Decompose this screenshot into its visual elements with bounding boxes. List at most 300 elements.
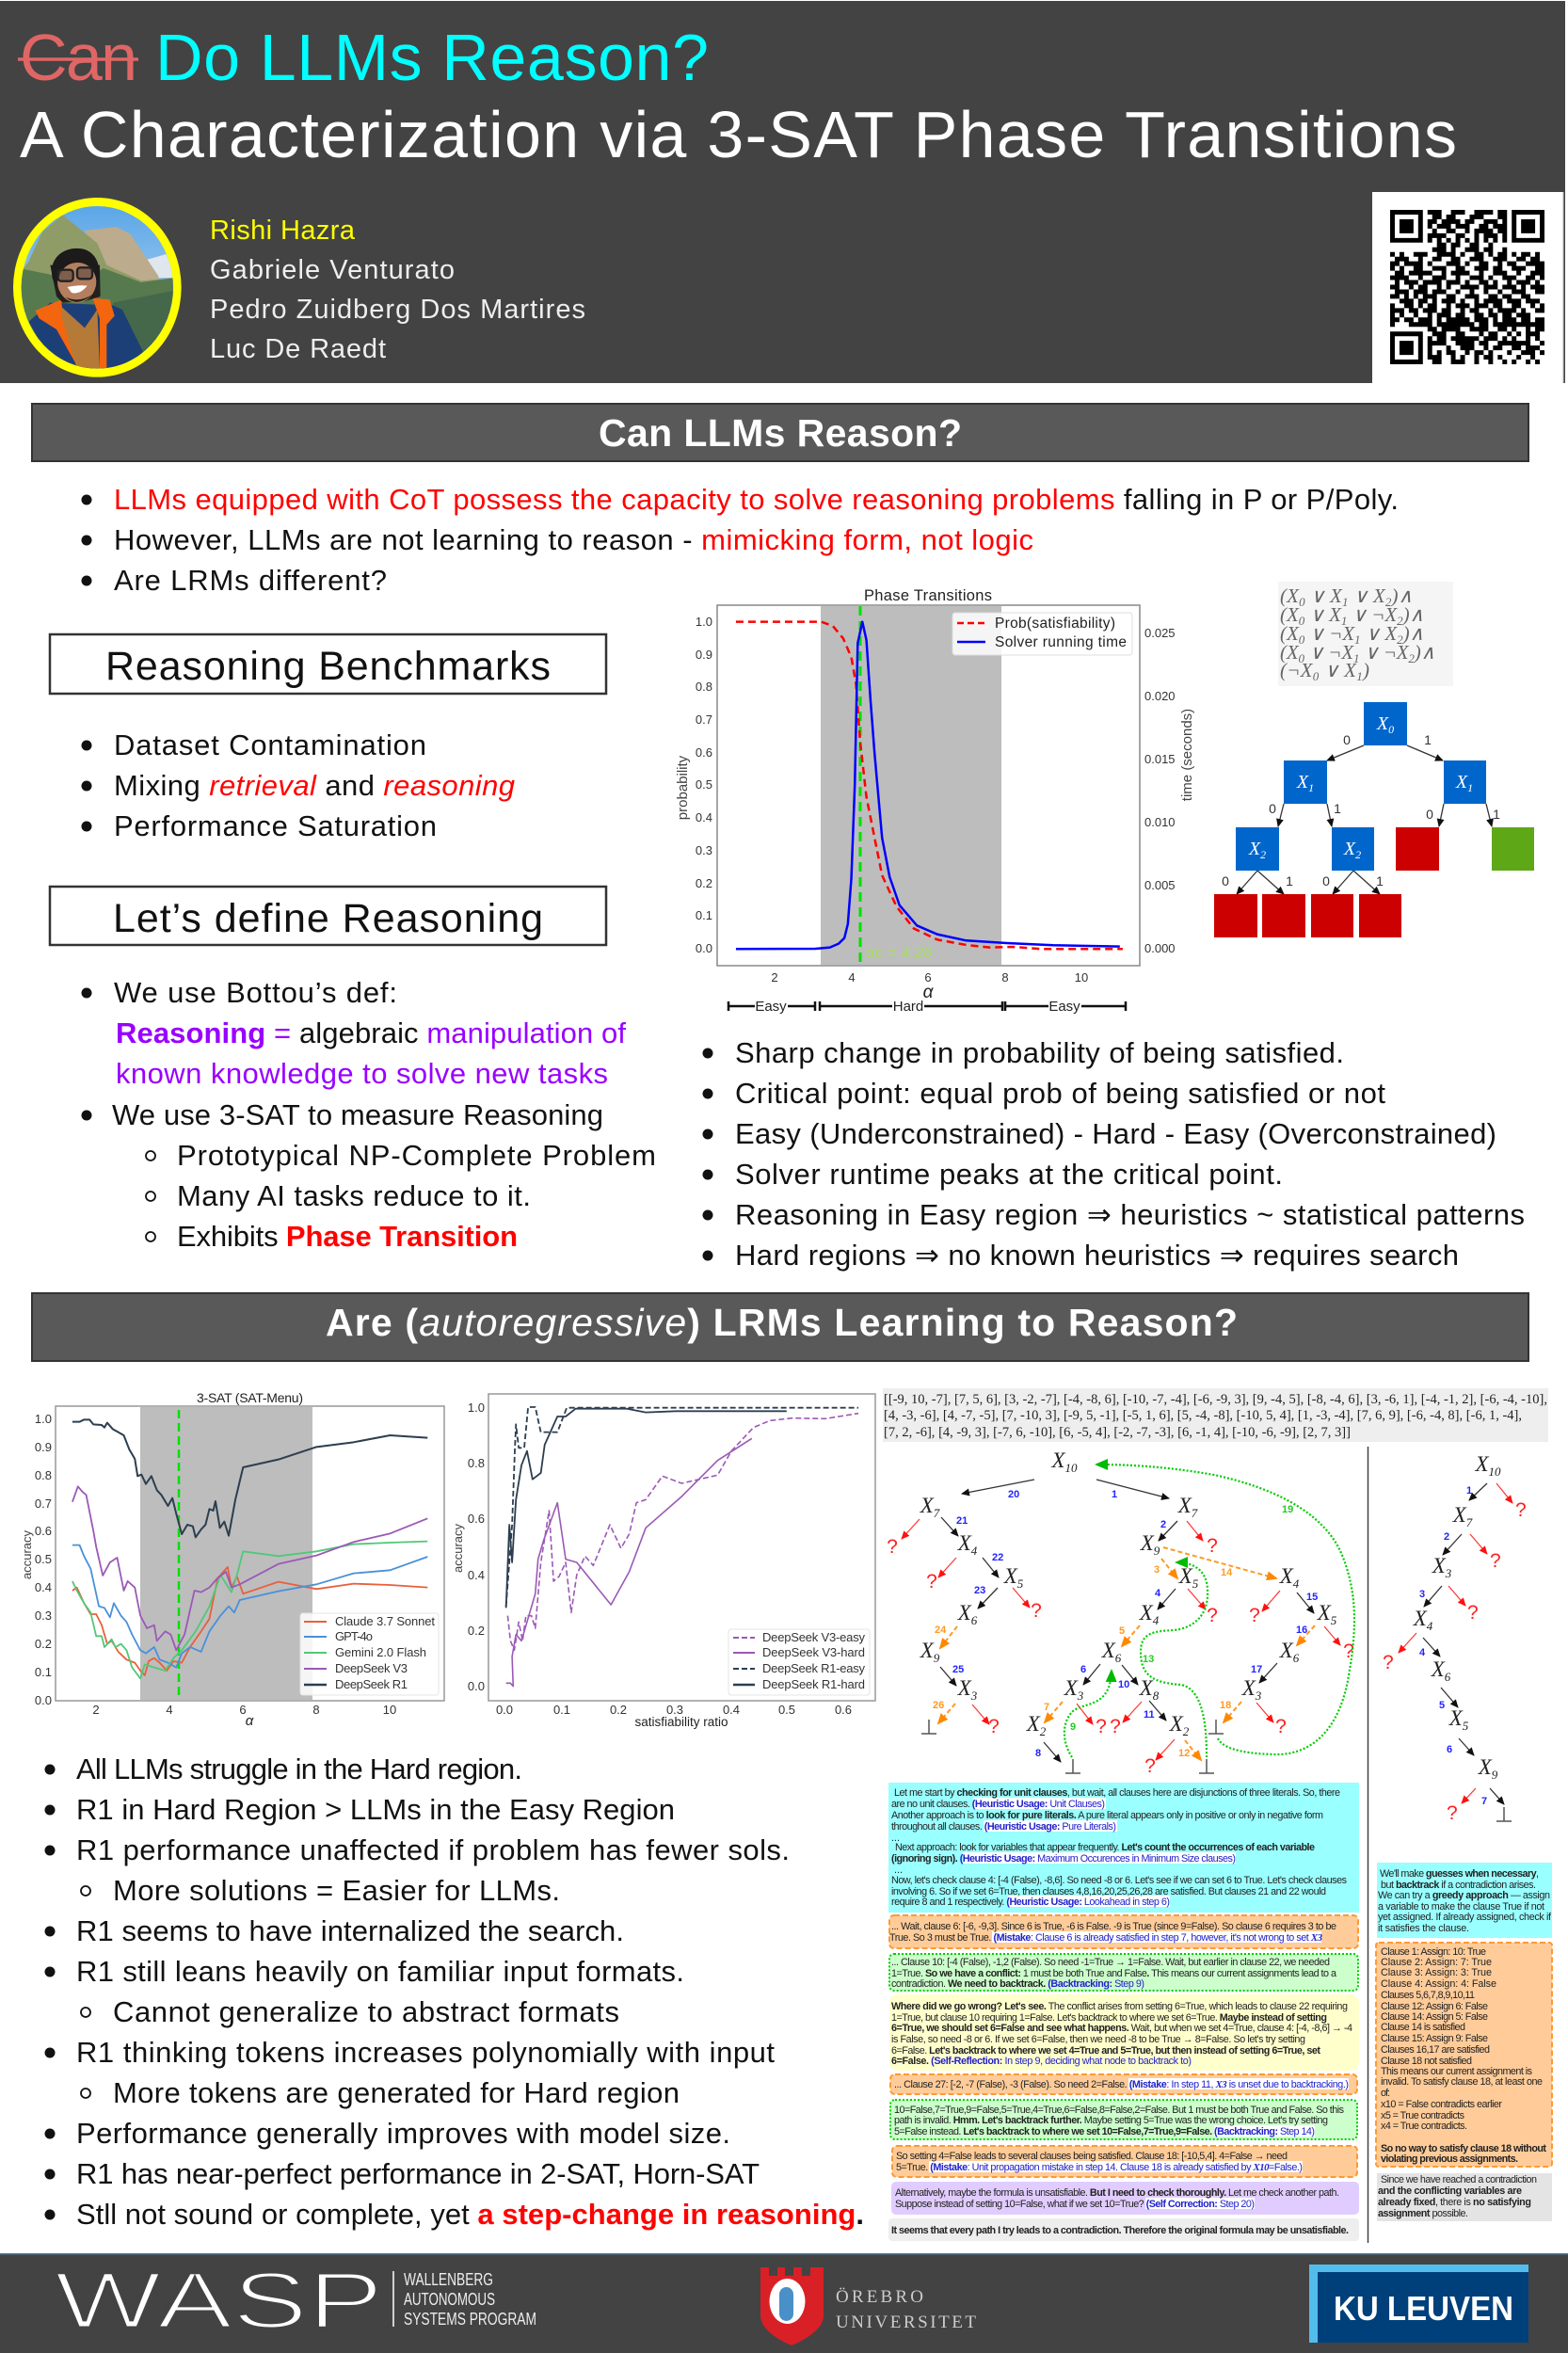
R1 search tree with backtracking: 22: [992, 1552, 1003, 1563]
logo: WASP: WALLENBERG: [404, 2270, 493, 2289]
DPLL decision tree: 1: [1286, 873, 1293, 888]
CNF formula: ∨ ¬X: [1304, 622, 1355, 645]
R1 search tree with backtracking: X: [1027, 1712, 1040, 1736]
intro bullets: [81, 483, 1399, 597]
easy hard easy scale: Easy: [755, 999, 787, 1015]
DPLL decision tree: 2: [1260, 848, 1266, 861]
phase transition bullets: [702, 1036, 1525, 1272]
R1 search tree with backtracking: ?: [1031, 1600, 1042, 1622]
CNF formula: ∨ X: [1349, 584, 1386, 607]
R1 search tree with backtracking: 5: [1119, 1625, 1125, 1637]
intro bullets: LLMs equipped with CoT possess the capacity to solve reasoning problems falling in P or P/Poly.: [114, 483, 1399, 516]
V3 search tree without backtracking: X: [1449, 1706, 1463, 1730]
CNF formula: ∨ X: [1361, 622, 1398, 645]
panel: mistake 1: ... Wait, clause 6: [-6, -9,3]. Since 6 is True, -6 is False. -9 is True (since 9=False). So clause 6 requires 3 to be: [891, 1921, 1336, 1932]
panel: self-reflection: is False, so need -8 or 6. If we set 6=False, then we need -8 to be True → 8=False. So let's try setting: [891, 2034, 1305, 2045]
R1 search tree with backtracking: 7: [1044, 1702, 1049, 1713]
panel: heuristic usage: require 8 and 1 respectively. (Heuristic Usage: Lookahead in step 6): [891, 1897, 1170, 1908]
panel: greedy approach: a variable to make the clause True if not: [1378, 1901, 1544, 1913]
panel: self-reflection: Where did we go wrong? Let's see. The conflict arises from setting 6=True, which leads to clause 22 requiring: [891, 2001, 1348, 2012]
accuracy vs satisfiability ratio chart: 0.2: [468, 1624, 485, 1638]
panel: backtracking 2: path is invalid. Hmm. Let's backtrack further. Maybe setting 5=True was the wrong choice. Let's try setting: [894, 2115, 1328, 2126]
panel: greedy approach: [1377, 1863, 1552, 1938]
CNF formula: 1: [1341, 614, 1347, 628]
V3 search tree without backtracking: ?: [1383, 1652, 1394, 1673]
accuracy chart: 3-SAT SAT-Menu: 0.1: [35, 1665, 52, 1679]
phase transition chart: 0.020: [1144, 689, 1176, 703]
V3 search tree without backtracking: 6: [1445, 1670, 1451, 1684]
phase transition chart: 0.015: [1144, 752, 1176, 766]
DPLL decision tree: 0: [1426, 807, 1433, 822]
DPLL decision tree: X: [1344, 839, 1355, 859]
logo: WASP: [55, 2256, 536, 2345]
CNF formula: ∨ ¬X: [1304, 641, 1354, 664]
accuracy chart: 3-SAT SAT-Menu: 0.6: [35, 1524, 52, 1538]
3-SAT clause list: [7, 2, -6], [4, -9, 3], [-7, 6, -10], [6, -5, 4], [-2, -7, -3], [6, -1, 4], [-10, -6, -9], [2, 7, 3]]: [884, 1425, 1351, 1440]
R1 search tree with backtracking: 26: [933, 1700, 944, 1711]
accuracy vs satisfiability ratio chart: 0.1: [553, 1703, 570, 1717]
phase transition chart: 0.5: [696, 777, 712, 792]
panel: mistake 3: [892, 2146, 1357, 2177]
panel: greedy approach: it satisfies the clause.: [1378, 1923, 1469, 1934]
accuracy vs satisfiability ratio chart: 0.4: [468, 1568, 485, 1582]
R1 search tree with backtracking: 6: [971, 1613, 978, 1627]
panel: self correction: [891, 2182, 1359, 2215]
DPLL decision tree: 1: [1334, 801, 1341, 816]
logo: Orebro University: [760, 2267, 976, 2345]
heading: Reasoning Benchmarks: [50, 634, 606, 694]
R1 search tree with backtracking: 21: [956, 1515, 968, 1527]
accuracy chart: 3-SAT SAT-Menu: [20, 1390, 444, 1729]
legend: DeepSeek R1: [335, 1677, 408, 1691]
DPLL decision tree: X: [1377, 713, 1388, 734]
panel: self correction: Alternatively, maybe the formula is unsatisfiable. But I need to check thoroughly. Let me check another path.: [895, 2187, 1339, 2199]
panel: clause assignments: This means our current assignment is: [1381, 2066, 1533, 2077]
phase transition chart: Phase Transitions: [864, 587, 992, 604]
phase transition chart: 1.0: [696, 615, 712, 629]
DPLL decision tree: 0: [1222, 873, 1229, 888]
panel: conclusion: [888, 2218, 1359, 2241]
R1 search tree with backtracking: ?: [1343, 1641, 1354, 1662]
logo: KU Leuven: [1309, 2265, 1528, 2343]
panel: mistake 3: So setting 4=False leads to several clauses being satisfied. Clause 18: [-10,5,4]. 4=False → need: [896, 2151, 1288, 2162]
DPLL decision tree: X: [1249, 839, 1260, 859]
benchmark bullets: Dataset Contamination: [114, 728, 426, 761]
CNF formula: )∧: [1402, 603, 1424, 626]
title line 1: Do LLMs Reason?: [155, 21, 709, 94]
R1 search tree with backtracking: X: [1280, 1639, 1293, 1662]
panel: clause assignments: Clause 18 not satisfied: [1381, 2056, 1472, 2067]
panel: heuristic usage: throughout all clauses. (Heuristic Usage: Pure Literals): [891, 1821, 1116, 1833]
legend: Solver running time: [995, 634, 1127, 650]
CNF formula: 1: [1356, 669, 1363, 683]
findings bullets: Cannot generalize to abstract formats: [113, 1995, 619, 2028]
accuracy chart: 3-SAT SAT-Menu: 0.7: [35, 1497, 52, 1511]
panel: backtracking 2: 10=False,7=True,9=False,5=True,4=True,6=False,8=False,2=False. But 1 must be both True and False. So this: [894, 2105, 1345, 2116]
phase transition chart: [675, 587, 1195, 1015]
panel: self-reflection: [889, 1994, 1359, 2071]
V3 search tree without backtracking: 3: [1445, 1566, 1452, 1580]
author photo: [13, 198, 182, 377]
accuracy vs satisfiability ratio chart: [451, 1394, 875, 1729]
V3 search tree without backtracking: ?: [1447, 1802, 1458, 1824]
phase transition bullets: Easy (Underconstrained) - Hard - Easy (Overconstrained): [735, 1117, 1496, 1150]
phase transition chart: probability: [675, 755, 691, 820]
V3 search tree without backtracking: X: [1414, 1607, 1427, 1630]
panel: clause assignments: Clauses 16,17 are satisfied: [1381, 2044, 1490, 2056]
accuracy vs satisfiability ratio chart: 0.3: [666, 1703, 683, 1717]
legend: DeepSeek R1-easy: [762, 1661, 866, 1675]
heading: Reasoning Benchmarks: Reasoning Benchmarks: [105, 644, 551, 689]
panel: self-reflection: 1=True, but clause 10 requiring 1=False. Let's backtrack to where we set 6=True. Maybe instead of setting: [891, 2012, 1327, 2024]
panel: self-reflection: 6=False. Let's backtrack to where we set 4=True and 5=True, but then instead of setting 6=True, set: [891, 2045, 1320, 2057]
accuracy chart: 3-SAT SAT-Menu: 0.9: [35, 1440, 52, 1454]
CNF formula: 1: [1354, 632, 1361, 647]
CNF formula: )∧: [1402, 622, 1424, 645]
findings bullets: R1 in Hard Region > LLMs in the Easy Region: [76, 1793, 675, 1826]
CNF formula: ∨ X: [1304, 603, 1342, 626]
panel: greedy approach: yet assigned. If already assigned, check if: [1378, 1912, 1552, 1923]
R1 search tree with backtracking: X: [1140, 1676, 1153, 1700]
panel: clause assignments: Clause 14 is satisfied: [1381, 2022, 1465, 2033]
R1 search tree with backtracking: X: [1170, 1712, 1183, 1736]
panel: clause assignments: Clause 15: Assign 9: False: [1381, 2033, 1488, 2044]
panel: clause assignments: violating previous assignments.: [1381, 2153, 1518, 2165]
benchmark bullets: Performance Saturation: [114, 809, 437, 842]
phase transition chart: 0.1: [696, 908, 712, 922]
DPLL decision tree: 0: [1388, 723, 1394, 736]
CNF formula: )∧: [1390, 584, 1413, 607]
panel: clause assignments: Clause 3: Assign: 3: True: [1381, 1967, 1492, 1978]
phase transition chart: 8: [1001, 970, 1009, 984]
legend: [952, 613, 1132, 655]
CNF formula: ∨ ¬X: [1359, 641, 1410, 664]
accuracy chart: 3-SAT SAT-Menu: 0.5: [35, 1552, 52, 1566]
DPLL decision tree: 1: [1376, 873, 1384, 888]
R1 search tree with backtracking: 9: [934, 1651, 940, 1665]
phase transition chart: 0.8: [696, 680, 712, 694]
divider: [1367, 1447, 1368, 2243]
phase transition chart: 10: [1075, 970, 1088, 984]
CNF formula: 0: [1299, 632, 1305, 647]
heading: Let's define Reasoning: [50, 887, 606, 945]
findings bullets: [45, 1753, 864, 2231]
section banner: Are autoregressive LRMs Learning to Reason?: Are (autoregressive) LRMs Learning to Reason?: [326, 1301, 1238, 1344]
reasoning definition bullets: [81, 976, 656, 1253]
panel: heuristic usage: are no unit clauses. (Heuristic Usage: Unit Clauses): [891, 1799, 1105, 1810]
DPLL decision tree: X: [1456, 772, 1467, 792]
panel: clause assignments: [1376, 1943, 1552, 2167]
DPLL decision tree: 0: [1269, 801, 1276, 816]
phase transition chart: 0.7: [696, 712, 712, 727]
panel: clause assignments: x4 = True contradicts.: [1381, 2121, 1467, 2132]
accuracy vs satisfiability ratio chart: 0.6: [835, 1703, 852, 1717]
panel: heuristic usage: Next approach: look for variables that appear frequently. Let's count the occurrences of each variable: [895, 1842, 1315, 1853]
reasoning definition bullets: Reasoning = algebraic manipulation of: [116, 1016, 626, 1049]
panel: backtracking 1: 1=True. So we have a conflict: 1 must be both True and False. This means our current assignments lead to a: [891, 1968, 1336, 1979]
accuracy chart: 3-SAT SAT-Menu: 0.0: [35, 1693, 52, 1707]
R1 search tree with backtracking: ?: [1275, 1716, 1287, 1737]
CNF formula: (X: [1280, 622, 1299, 645]
panel: heuristic usage: ...: [891, 1833, 900, 1844]
panel: conclusion: It seems that every path I try leads to a contradiction. Therefore the original formula may be unsatisfiable.: [891, 2225, 1349, 2236]
phase transition bullets: Reasoning in Easy region ⇒ heuristics ~ statistical patterns: [735, 1198, 1525, 1231]
V3 search tree without backtracking: 7: [1481, 1796, 1487, 1807]
panel: heuristic usage: involving 6. So if we set 6=True, then clauses 4,8,16,20,25,26,28 are satisfied. But clauses 21 and 22 would: [891, 1886, 1326, 1897]
R1 search tree with backtracking: 7: [934, 1506, 940, 1520]
R1 search tree with backtracking: 3: [1154, 1564, 1160, 1576]
reasoning definition bullets: We use Bottou’s def:: [114, 976, 397, 1009]
CNF formula: (X: [1280, 584, 1299, 607]
R1 search tree with backtracking: 3: [1255, 1689, 1262, 1703]
V3 search tree without backtracking: 10: [1489, 1465, 1501, 1479]
panel: contradiction note: Since we have reached a contradiction: [1381, 2174, 1537, 2185]
accuracy vs satisfiability ratio chart: 0.2: [610, 1703, 627, 1717]
DPLL decision tree: 0: [1322, 873, 1330, 888]
logo: WASP: WASP: [55, 2256, 383, 2345]
3-SAT clause list: [4, -3, -6], [4, -7, -5], [7, -10, 3], [-9, 5, -1], [-5, 1, 6], [5, -4, -8], [-10, 5, 4], [1, -3, -4], [7, 6, 9], [-6, -4, 8], [-6, 1, -4],: [884, 1408, 1522, 1423]
DPLL decision tree: 1: [1308, 781, 1314, 794]
R1 search tree with backtracking: 4: [1293, 1577, 1300, 1591]
R1 search tree with backtracking: 4: [1155, 1588, 1161, 1599]
R1 search tree with backtracking: 1: [1112, 1489, 1117, 1500]
CNF formula: ∨ X: [1305, 584, 1343, 607]
R1 search tree with backtracking: 19: [1282, 1504, 1293, 1515]
findings bullets: R1 thinking tokens increases polynomially with input: [76, 2036, 775, 2069]
R1 search tree with backtracking: 4: [971, 1544, 978, 1558]
CNF formula: ): [1362, 659, 1369, 681]
DPLL decision tree: 1: [1493, 807, 1500, 822]
R1 search tree with backtracking: X: [1004, 1564, 1017, 1588]
accuracy chart: 3-SAT SAT-Menu: 0.8: [35, 1468, 52, 1482]
R1 search tree with backtracking: 20: [1008, 1489, 1019, 1500]
DPLL decision tree: 0: [1343, 732, 1351, 747]
accuracy vs satisfiability ratio chart: 0.0: [496, 1703, 513, 1717]
R1 search tree with backtracking: 3: [1077, 1689, 1084, 1703]
R1 search tree with backtracking: 7: [1192, 1506, 1198, 1520]
authors: [210, 216, 585, 364]
R1 search tree with backtracking: X: [920, 1494, 934, 1517]
phase transition chart: 0.025: [1144, 626, 1176, 640]
CNF formula: (X: [1280, 641, 1299, 664]
accuracy chart: 3-SAT SAT-Menu: 0.3: [35, 1609, 52, 1623]
R1 search tree with backtracking: 9: [1070, 1721, 1076, 1733]
V3 search tree without backtracking: X: [1432, 1554, 1446, 1577]
R1 search tree with backtracking: 16: [1296, 1625, 1307, 1636]
phase transition chart: 0.000: [1144, 941, 1176, 955]
V3 search tree without backtracking: 2: [1444, 1531, 1449, 1543]
accuracy chart: 3-SAT SAT-Menu: 0.4: [35, 1580, 52, 1594]
CNF formula: 1: [1353, 651, 1359, 665]
panel: backtracking 2: 5=False instead. Let's backtrack to where we set 10=False,7=True,9=False. (Backtracking: Step 14): [894, 2126, 1315, 2137]
panel: backtracking 1: contradiction. We need to backtrack. (Backtracking: Step 9): [891, 1978, 1144, 1990]
panel: mistake 2: [890, 2074, 1357, 2094]
panel: backtracking 1: [889, 1954, 1358, 1991]
panel: clause assignments: Clause 1: Assign: 10: True: [1381, 1946, 1486, 1958]
V3 search tree without backtracking: 9: [1492, 1768, 1498, 1782]
panel: heuristic usage: Now, let's check clause 4: [-4 (False), -8,6]. So need -8 or 6. Let's see if we can set 6 to True. Let's check clauses: [891, 1875, 1348, 1886]
phase transition chart: 0.0: [696, 941, 712, 955]
authors: Luc De Raedt: [210, 334, 386, 364]
easy hard easy scale: Easy: [1048, 999, 1080, 1015]
legend: DeepSeek V3-hard: [762, 1645, 865, 1659]
DPLL decision tree: [1214, 702, 1534, 937]
V3 search tree without backtracking: ?: [1490, 1550, 1501, 1572]
CNF formula: )∧: [1414, 641, 1435, 664]
panel: greedy approach: but backtrack if a contradiction arises.: [1381, 1880, 1536, 1891]
R1 search tree with backtracking: X: [1051, 1449, 1065, 1472]
findings bullets: R1 still leans heavily on familiar input formats.: [76, 1955, 684, 1988]
CNF formula: (X: [1280, 603, 1299, 626]
CNF formula: 0: [1299, 614, 1305, 628]
CNF formula: 0: [1299, 651, 1305, 665]
R1 search tree with backtracking: X: [1318, 1601, 1331, 1625]
findings bullets: R1 performance unaffected if problem has fewer sols.: [76, 1833, 790, 1866]
panel: mistake 2: ... Clause 27: [-2, -7 (False), -3 (False). So need 2=False. (Mistake: In step 11, X3 is unset due to backtracking.): [894, 2079, 1349, 2090]
accuracy vs satisfiability ratio chart: 0.8: [468, 1456, 485, 1470]
DPLL decision tree: 1: [1467, 781, 1473, 794]
accuracy vs satisfiability ratio chart: accuracy: [451, 1523, 465, 1573]
R1 search tree with backtracking: X: [958, 1676, 971, 1700]
panel: contradiction note: already fixed, there is no satisfying: [1378, 2197, 1531, 2208]
R1 search tree with backtracking: ?: [1207, 1605, 1218, 1626]
logo: Orebro University: ÖREBRO: [836, 2287, 923, 2307]
benchmark bullets: [81, 728, 515, 842]
R1 search tree with backtracking: X: [1280, 1564, 1293, 1588]
CNF formula: 0: [1313, 669, 1320, 683]
R1 search tree with backtracking: X: [1179, 1564, 1192, 1588]
R1 search tree with backtracking: 24: [935, 1625, 947, 1636]
section banner: Can LLMs Reason?: Can LLMs Reason?: [599, 411, 962, 455]
panel: backtracking 2: [890, 2100, 1357, 2139]
R1 search tree with backtracking: 10: [1065, 1461, 1078, 1475]
panel: greedy approach: We can try a greedy approach — assign: [1378, 1890, 1550, 1901]
CNF formula: [1278, 582, 1453, 686]
QR code: [1372, 192, 1563, 384]
panel: contradiction note: [1377, 2173, 1552, 2221]
R1 search tree with backtracking: 13: [1143, 1654, 1154, 1665]
panel: heuristic usage: (ignoring sign). (Heuristic Usage: Maximum Occurences in Minimum Size clauses): [891, 1853, 1236, 1865]
phase transition chart: 6: [924, 970, 932, 984]
R1 search tree with backtracking: 14: [1221, 1567, 1233, 1578]
authors: Pedro Zuidberg Dos Martires: [210, 295, 585, 325]
accuracy chart: 3-SAT SAT-Menu: 0.2: [35, 1637, 52, 1651]
section banner: Are autoregressive LRMs Learning to Reason?: [32, 1293, 1528, 1361]
easy hard easy scale: [728, 998, 1126, 1015]
phase transition chart: αc = 4.26: [866, 945, 932, 961]
authors: Rishi Hazra: [210, 216, 356, 246]
accuracy chart: 3-SAT SAT-Menu: 4: [166, 1703, 173, 1717]
panel: clause assignments: Clause 14: Assign 5: False: [1381, 2011, 1488, 2023]
V3 search tree without backtracking: X: [1453, 1503, 1466, 1527]
R1 search tree with backtracking: ?: [1096, 1716, 1107, 1737]
accuracy chart: 3-SAT SAT-Menu: α: [246, 1713, 254, 1729]
legend: Prob(satisfiability): [995, 616, 1115, 632]
R1 search tree with backtracking: X: [1242, 1676, 1256, 1700]
logo: WASP: SYSTEMS PROGRAM: [404, 2310, 536, 2329]
V3 search tree without backtracking: ?: [1467, 1602, 1479, 1624]
R1 search tree with backtracking: 12: [1178, 1748, 1190, 1759]
3-SAT clause list: [883, 1388, 1548, 1442]
logo: KU Leuven: KU LEUVEN: [1334, 2289, 1513, 2328]
R1 search tree with backtracking: 2: [1183, 1724, 1190, 1738]
accuracy chart: 3-SAT SAT-Menu: 1.0: [35, 1412, 52, 1426]
panel: clause assignments: of:: [1381, 2088, 1390, 2099]
findings bullets: More tokens are generated for Hard region: [113, 2076, 680, 2109]
accuracy vs satisfiability ratio chart: 0.0: [468, 1679, 485, 1693]
R1 search tree with backtracking: X: [1102, 1639, 1115, 1662]
legend: DeepSeek V3-easy: [762, 1630, 866, 1644]
R1 search tree with backtracking: 3: [970, 1689, 978, 1703]
V3 search tree without backtracking: 5: [1463, 1719, 1469, 1733]
R1 search tree with backtracking: 23: [974, 1585, 985, 1596]
V3 search tree without backtracking: 1: [1466, 1485, 1472, 1497]
R1 search tree with backtracking: 2: [1160, 1519, 1166, 1530]
R1 search tree with backtracking: ?: [988, 1716, 1000, 1737]
R1 search tree with backtracking: ?: [926, 1571, 937, 1593]
CNF formula: 2: [1397, 632, 1403, 647]
authors: Gabriele Venturato: [210, 255, 455, 285]
R1 search tree with backtracking: ?: [1110, 1716, 1121, 1737]
R1 search tree with backtracking: 5: [1017, 1577, 1024, 1591]
panel: contradiction note: assignment possible.: [1378, 2208, 1468, 2219]
R1 search tree with backtracking: 6: [1080, 1664, 1086, 1675]
panel: heuristic usage: ...: [894, 1865, 903, 1876]
panel: heuristic usage: [888, 1783, 1359, 1913]
CNF formula: 0: [1299, 595, 1305, 609]
V3 search tree without backtracking: 5: [1439, 1700, 1445, 1711]
R1 search tree with backtracking: X: [1178, 1494, 1192, 1517]
V3 search tree without backtracking: ?: [1515, 1499, 1527, 1521]
logo: WASP: AUTONOMOUS: [404, 2290, 495, 2309]
V3 search tree without backtracking: X: [1432, 1657, 1445, 1681]
phase transition chart: 0.3: [696, 843, 712, 857]
intro bullets: Are LRMs different?: [114, 564, 387, 597]
findings bullets: Stll not sound or complete, yet a step-change in reasoning.: [76, 2198, 864, 2231]
R1 search tree with backtracking: 10: [1118, 1679, 1129, 1690]
phase transition bullets: Sharp change in probability of being satisfied.: [735, 1036, 1344, 1069]
V3 search tree without backtracking: X: [1479, 1755, 1492, 1779]
R1 search tree with backtracking: 8: [1153, 1689, 1160, 1703]
R1 search tree with backtracking: 4: [1153, 1613, 1160, 1627]
R1 search tree with backtracking: ?: [887, 1536, 898, 1558]
easy hard easy scale: Hard: [893, 999, 923, 1015]
CNF formula: 2: [1408, 651, 1415, 665]
R1 search tree with backtracking: X: [1141, 1531, 1154, 1555]
DPLL decision tree: X: [1297, 772, 1308, 792]
findings bullets: R1 seems to have internalized the search.: [76, 1914, 624, 1947]
R1 search tree with backtracking: 6: [1293, 1651, 1300, 1665]
legend: [728, 1629, 870, 1695]
phase transition bullets: Hard regions ⇒ no known heuristics ⇒ requires search: [735, 1239, 1459, 1272]
benchmark bullets: Mixing retrieval and reasoning: [114, 769, 515, 802]
reasoning definition bullets: known knowledge to solve new tasks: [116, 1057, 608, 1090]
panel: self correction: Suppose instead of setting 10=False, what if we set 10=True? (Self Correction: Step 20): [895, 2199, 1255, 2210]
accuracy chart: 3-SAT SAT-Menu: 10: [383, 1703, 396, 1717]
panel: self-reflection: 6=True, we should set 6=False and see what happens. Wait, but when we set 4=True, clause 4: [-4, -8,6] → -4: [891, 2023, 1352, 2034]
panel: clause assignments: So no way to satisfy clause 18 without: [1381, 2143, 1546, 2154]
phase transition chart: 0.9: [696, 648, 712, 662]
R1 search tree with backtracking: 5: [1192, 1577, 1199, 1591]
R1 search tree with backtracking: 9: [1154, 1544, 1160, 1558]
reasoning definition bullets: We use 3-SAT to measure Reasoning: [112, 1098, 603, 1131]
legend: DeepSeek R1-hard: [762, 1677, 865, 1691]
phase transition chart: 0.6: [696, 745, 712, 760]
V3 search tree without backtracking: 7: [1466, 1515, 1473, 1529]
phase transition chart: 4: [848, 970, 856, 984]
phase transition chart: 0.010: [1144, 815, 1176, 829]
panel: heuristic usage: Another approach is to look for pure literals. A pure literal appears only in positive or only in negative form: [891, 1810, 1323, 1821]
